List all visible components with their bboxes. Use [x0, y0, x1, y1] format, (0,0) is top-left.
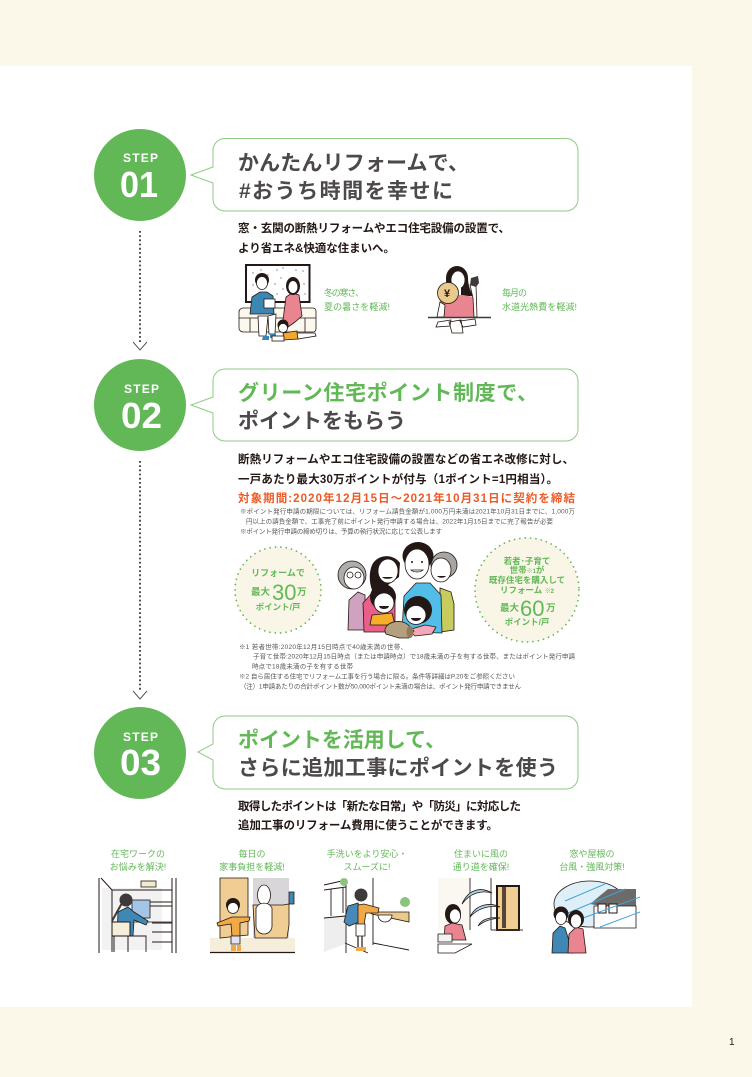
step 2 badge: 02	[121, 395, 162, 436]
footnotes: ※2 自ら居住する住宅でリフォーム工事を行う場合に限る。条件等詳細はP.20をご参照ください	[239, 672, 515, 680]
footnotes: （注）1申請あたりの合計ポイント数が50,000ポイント未満の場合は、ポイント発行申請できません	[240, 682, 522, 690]
step 1 heading	[238, 152, 469, 203]
step 2 body text: 一戸あたり最大30万ポイントが付与（1ポイント=1円相当）。	[238, 472, 558, 486]
illustration: family on sofa by snowy window	[239, 265, 316, 341]
step 3 body text: 取得したポイントは「新たな日常」や「防災」に対応した	[238, 799, 521, 813]
badge: young and child-rearing households up to 600,000 points: リフォーム ※2	[500, 585, 555, 595]
badge: young and child-rearing households up to 600,000 points: ポイント/戸	[505, 617, 549, 627]
step 3 heading	[238, 729, 558, 780]
illustration: boy washing hands	[324, 878, 410, 953]
item: ventilation: 通り道を確保!	[453, 861, 509, 872]
step 2 speech bubble	[191, 369, 578, 441]
arrow from step 2 to step 3	[133, 461, 147, 699]
step 1 badge	[94, 129, 186, 221]
point notes: ※ポイント発行申請の締め切りは、予算の執行状況に応じて公表します	[240, 526, 442, 536]
badge: young and child-rearing households up to 600,000 points: 既存住宅を購入して	[489, 575, 565, 585]
step 3 body text: 追加工事のリフォーム費用に使うことができます。	[238, 818, 498, 832]
step 3 badge: STEP	[123, 730, 158, 744]
step 1 body text	[238, 221, 510, 255]
badge: young and child-rearing households up to 600,000 points: 60	[520, 596, 544, 621]
item: handwashing: 手洗いをより安心・	[327, 848, 407, 859]
item: home work: お悩みを解決!	[110, 861, 166, 872]
badge: young and child-rearing households up to 600,000 points: 万	[546, 603, 556, 614]
badge: reform up to 300,000 points: 最大	[251, 586, 271, 598]
caption: utility cost saving: 水道光熱費を軽減!	[502, 301, 577, 312]
step 3 badge	[94, 707, 186, 799]
item: housework	[210, 848, 295, 952]
step 2 badge	[94, 359, 186, 451]
footnotes: 時点で18歳未満の子を有する世帯	[252, 662, 354, 670]
caption: winter and summer comfort: 冬の寒さ、	[324, 287, 364, 298]
badge: young and child-rearing households up to 600,000 points: 世帯※1が	[510, 565, 545, 575]
illustration: woman holding coin at table: ¥	[444, 288, 451, 300]
step 3 speech bubble	[198, 716, 578, 789]
step 2 heading: グリーン住宅ポイント制度で、	[238, 381, 538, 405]
step 1 badge: STEP	[123, 151, 158, 165]
step 1 speech bubble	[191, 138, 578, 211]
arrow from step 1 to step 2	[133, 231, 147, 350]
item: home work: 在宅ワークの	[111, 848, 165, 859]
item: handwashing: スムーズに!	[343, 861, 391, 872]
step 2 badge: STEP	[124, 382, 159, 396]
item: ventilation	[438, 848, 523, 953]
item: ventilation: 住まいに風の	[454, 848, 508, 859]
badge: reform up to 300,000 points: 万	[297, 587, 307, 598]
badge: reform up to 300,000 points: 30	[272, 580, 296, 605]
step 1 heading: #おうち時間を幸せに	[239, 180, 453, 203]
step 2 body text: 断熱リフォームやエコ住宅設備の設置などの省エネ改修に対し、	[238, 452, 574, 466]
item: home work	[99, 848, 176, 953]
illustration: home office desk	[99, 878, 176, 953]
item: typhoon protection	[552, 848, 640, 953]
caption: winter and summer comfort	[324, 287, 390, 312]
target period: 対象期間:2020年12月15日〜2021年10月31日に契約を締結	[238, 491, 576, 505]
step 3 badge: 03	[120, 742, 161, 783]
step 1 body text: 窓・玄関の断熱リフォームやエコ住宅設備の設置で、	[238, 221, 510, 235]
step 1 heading: かんたんリフォームで、	[238, 152, 469, 175]
point notes: ※ポイント発行申請の期限については、リフォーム請負金額が1,000万円未満は2021年10月31日までに、1,000万	[240, 506, 576, 516]
step 3 heading: ポイントを活用して、	[238, 729, 446, 752]
illustration: couple looking at house in wind	[552, 881, 640, 953]
illustration: woman and wind from window	[438, 878, 523, 953]
illustration: woman holding coin at table	[428, 266, 491, 333]
step 2 body text	[238, 452, 574, 486]
item: typhoon protection: 台風・強風対策!	[559, 861, 625, 872]
footnotes: 子育て世帯:2020年12月15日時点（または申請時点）で18歳未満の子を有する世帯、またはポイント発行申請	[253, 652, 576, 660]
caption: winter and summer comfort: 夏の暑さを軽減!	[324, 301, 390, 312]
step 2 heading: ポイントをもらう	[238, 410, 406, 433]
badge: young and child-rearing households up to 600,000 points: 若者･子育て	[504, 556, 550, 566]
badge: reform up to 300,000 points: リフォームで	[251, 568, 305, 578]
point notes: 円以上の請負金額で、工事完了前にポイント発行申請する場合は、2022年1月15日までに完了報告が必要	[246, 516, 554, 526]
item: housework: 毎日の	[238, 848, 266, 859]
item: typhoon protection: 窓や屋根の	[569, 848, 615, 859]
step 1 body text: より省エネ&快適な住まいへ。	[238, 241, 395, 255]
badge: young and child-rearing households up to 600,000 points	[475, 538, 579, 642]
illustration: boy at toilet door	[210, 878, 295, 952]
item: housework: 家事負担を軽減!	[219, 861, 285, 872]
point notes	[240, 506, 576, 536]
item: handwashing	[324, 848, 410, 953]
footnotes	[239, 642, 576, 690]
caption: utility cost saving: 毎月の	[502, 287, 527, 298]
badge: reform up to 300,000 points	[235, 547, 321, 633]
step 3 heading: さらに追加工事にポイントを使う	[238, 756, 558, 780]
badge: young and child-rearing households up to 600,000 points: 最大	[500, 602, 520, 614]
step 2 heading	[238, 381, 538, 433]
illustration: three-generation family	[338, 542, 457, 638]
footnotes: ※1 若者世帯:2020年12月15日時点で40歳未満の世帯、	[239, 642, 407, 651]
step 3 body text	[238, 799, 521, 832]
step 1 badge: 01	[120, 164, 158, 205]
caption: utility cost saving	[502, 287, 577, 312]
page number: 1	[729, 1037, 735, 1048]
badge: reform up to 300,000 points: ポイント/戸	[256, 602, 300, 612]
